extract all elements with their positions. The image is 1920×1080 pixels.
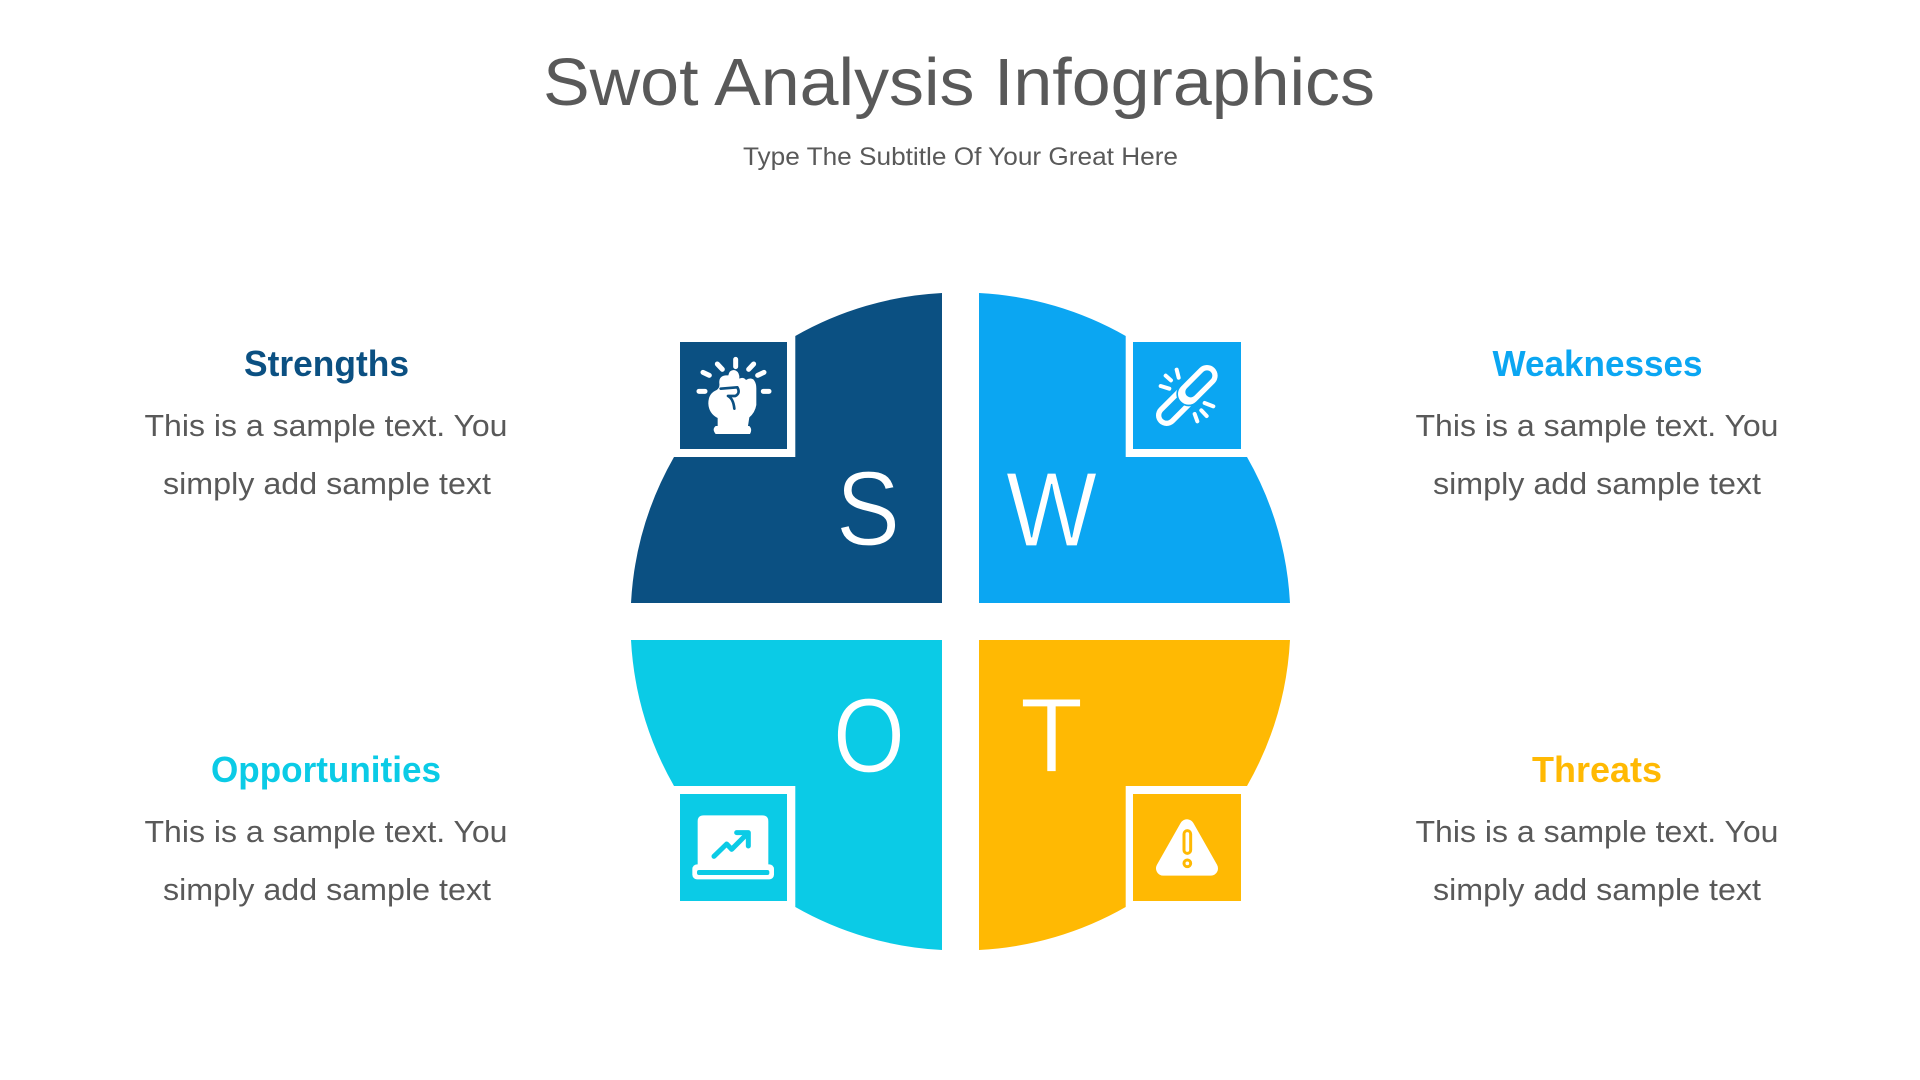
letter T: T xyxy=(1020,677,1083,795)
letter S: S xyxy=(836,450,900,568)
body text: threats: This is a sample text. You xyxy=(1416,814,1778,849)
panel: weaknesses text xyxy=(1416,343,1778,501)
icon: laptop with rising chart xyxy=(692,815,774,879)
letter W: W xyxy=(1006,451,1097,569)
heading: strengths: Strengths xyxy=(244,343,409,384)
title: Swot Analysis Infographics xyxy=(543,45,1375,120)
body text: strengths: This is a sample text. You xyxy=(144,408,508,443)
quadrant shape S xyxy=(631,293,942,603)
body text: threats: simply add sample text xyxy=(1433,872,1761,907)
quadrant: T threats xyxy=(979,640,1290,950)
panel: threats text xyxy=(1416,749,1778,907)
body text: weaknesses: This is a sample text. You xyxy=(1416,408,1778,443)
quadrant shape O xyxy=(631,640,942,950)
quadrant: O opportunities xyxy=(631,640,942,950)
heading: threats: Threats xyxy=(1532,749,1662,790)
quadrant: W weaknesses xyxy=(979,293,1290,603)
heading: opportunities: Opportunities xyxy=(211,749,441,790)
quadrant: S strengths xyxy=(631,293,942,603)
body text: opportunities: simply add sample text xyxy=(163,872,491,907)
icon box: broken link xyxy=(1133,342,1241,449)
letter O: O xyxy=(833,677,905,795)
icon: raised fist xyxy=(699,359,769,434)
icon box: laptop xyxy=(680,794,787,901)
body text: opportunities: This is a sample text. You xyxy=(144,814,508,849)
heading: weaknesses: Weaknesses xyxy=(1492,343,1702,384)
body text: strengths: simply add sample text xyxy=(163,466,491,501)
quadrant shape T xyxy=(979,640,1290,950)
icon box: fist xyxy=(680,342,787,449)
icon box: warning xyxy=(1133,794,1241,901)
icon: broken chain link xyxy=(1161,370,1213,421)
body text: weaknesses: simply add sample text xyxy=(1433,466,1761,501)
panel: opportunities text xyxy=(144,749,508,907)
quadrant shape W xyxy=(979,293,1290,603)
icon: warning triangle xyxy=(1163,827,1211,868)
panel: strengths text xyxy=(144,343,508,501)
subtitle: Type The Subtitle Of Your Great Here xyxy=(743,143,1178,171)
